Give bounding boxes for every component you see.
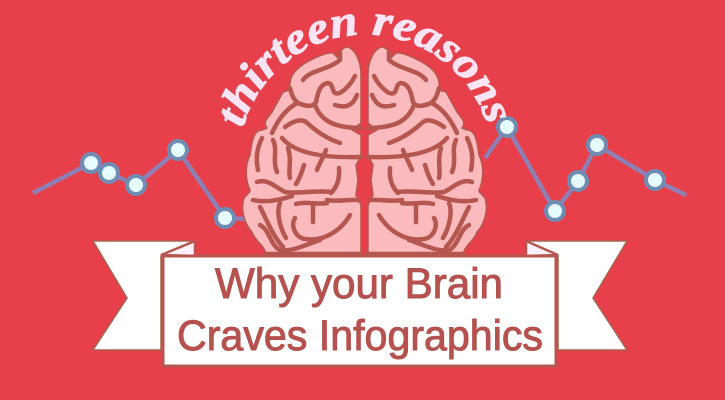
- ribbon tail: right: [526, 241, 627, 350]
- left line chart: [33, 141, 247, 227]
- right line chart: [485, 118, 686, 220]
- icon: brain: [243, 47, 486, 254]
- ribbon title panel: [163, 256, 556, 366]
- title line 1: Why your Brain: [215, 260, 503, 308]
- ribbon tail: left: [93, 241, 195, 350]
- title line 2: Craves Infographics: [177, 312, 543, 360]
